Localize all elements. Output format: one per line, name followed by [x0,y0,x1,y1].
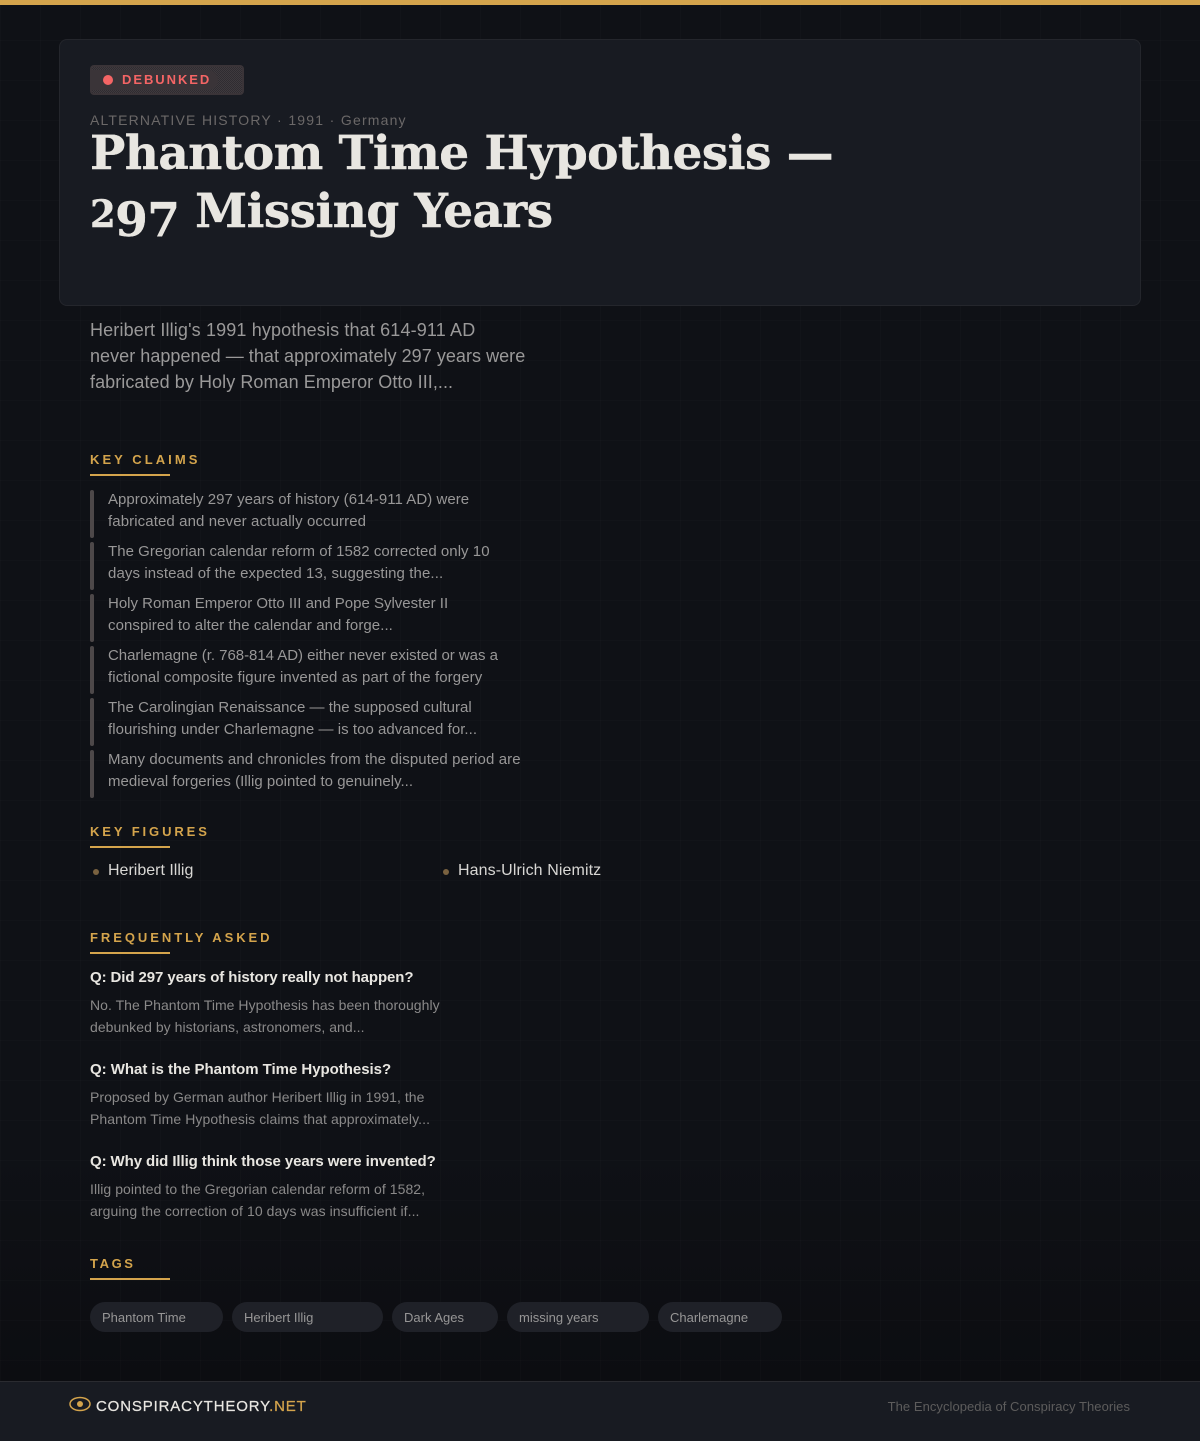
claim 2 [90,542,490,590]
faq 1 question: Q: Did 297 years of history really not happen? [90,969,413,986]
badge: debunked [90,65,244,95]
tag: Phantom Time [90,1302,223,1332]
tag: missing years: missing years [519,1310,598,1325]
faq 2 question: Q: What is the Phantom Time Hypothesis? [90,1061,391,1078]
claim 4: Charlemagne (r. 768-814 AD) either never existed or was a [108,647,498,664]
claim 6: medieval forgeries (Illig pointed to genuinely... [108,773,413,790]
faq 1 answer: debunked by historians, astronomers, and... [90,1019,365,1035]
faq 3 answer: arguing the correction of 10 days was insufficient if... [90,1203,420,1219]
claim 2: days instead of the expected 13, suggesting the... [108,565,443,582]
tag: Heribert Illig: Heribert Illig [244,1310,313,1325]
tag: Charlemagne: Charlemagne [670,1310,748,1325]
faq 3 answer [90,1181,425,1219]
faq 2 answer: Proposed by German author Heribert Illig in 1991, the [90,1089,424,1105]
tag: Dark Ages: Dark Ages [404,1310,464,1325]
summary text [90,320,525,392]
claim 6: Many documents and chronicles from the disputed period are [108,751,521,768]
title [90,126,833,248]
claims list [90,490,521,798]
icon: status dot [103,75,113,85]
summary text: Heribert Illig's 1991 hypothesis that 614-911 AD [90,320,475,340]
title: Phantom Time Hypothesis — [90,126,833,181]
tag: missing years [507,1302,649,1332]
category line: ALTERNATIVE HISTORY · 1991 · Germany [90,112,407,128]
footer [0,1381,1200,1441]
claim 6 [90,750,521,798]
faq 3 question: Q: Why did Illig think those years were invented? [90,1153,436,1170]
faq 1 answer [90,997,440,1035]
claim 4: fictional composite figure invented as part of the forgery [108,669,482,686]
icon: eye logo [69,1396,91,1412]
badge label: DEBUNKED [122,72,211,87]
claim 3 [90,594,448,642]
faq 2 answer [90,1089,430,1127]
claim 5 [90,698,477,746]
top accent bar [0,0,1200,5]
claim 1: fabricated and never actually occurred [108,513,366,530]
summary text: fabricated by Holy Roman Emperor Otto III,... [90,372,453,392]
title: 297 Missing Years [90,184,552,248]
claim 1: Approximately 297 years of history (614-911 AD) were [108,491,469,508]
heading: key figures: KEY FIGURES [90,824,210,839]
tagline: The Encyclopedia of Conspiracy Theories [888,1399,1130,1414]
summary text: never happened — that approximately 297 years were [90,346,525,366]
claim 4 [90,646,498,694]
tag: Phantom Time: Phantom Time [102,1310,186,1325]
claim 3: Holy Roman Emperor Otto III and Pope Sylvester II [108,595,448,612]
claim 1 [90,490,469,538]
logo wordmark: CONSPIRACYTHEORY.NET [96,1398,307,1415]
panel: header card [59,39,1141,306]
faq 3 answer: Illig pointed to the Gregorian calendar reform of 1582, [90,1181,425,1197]
claim 5: flourishing under Charlemagne — is too advanced for... [108,721,477,738]
heading: tags: TAGS [90,1256,136,1271]
faq 2 answer: Phantom Time Hypothesis claims that approximately... [90,1111,430,1127]
claim 5: The Carolingian Renaissance — the supposed cultural [108,699,472,716]
faq 1 answer: No. The Phantom Time Hypothesis has been thoroughly [90,997,440,1013]
claim 2: The Gregorian calendar reform of 1582 corrected only 10 [108,543,490,560]
heading: key claims: KEY CLAIMS [90,452,200,467]
tag: Charlemagne [658,1302,782,1332]
figure: Heribert Illig: Heribert Illig [108,862,193,879]
claim 3: conspired to alter the calendar and forge... [108,617,393,634]
heading: frequently asked: FREQUENTLY ASKED [90,930,273,945]
figure: Hans-Ulrich Niemitz: Hans-Ulrich Niemitz [458,862,601,879]
tag: Heribert Illig [232,1302,383,1332]
tag: Dark Ages [392,1302,498,1332]
